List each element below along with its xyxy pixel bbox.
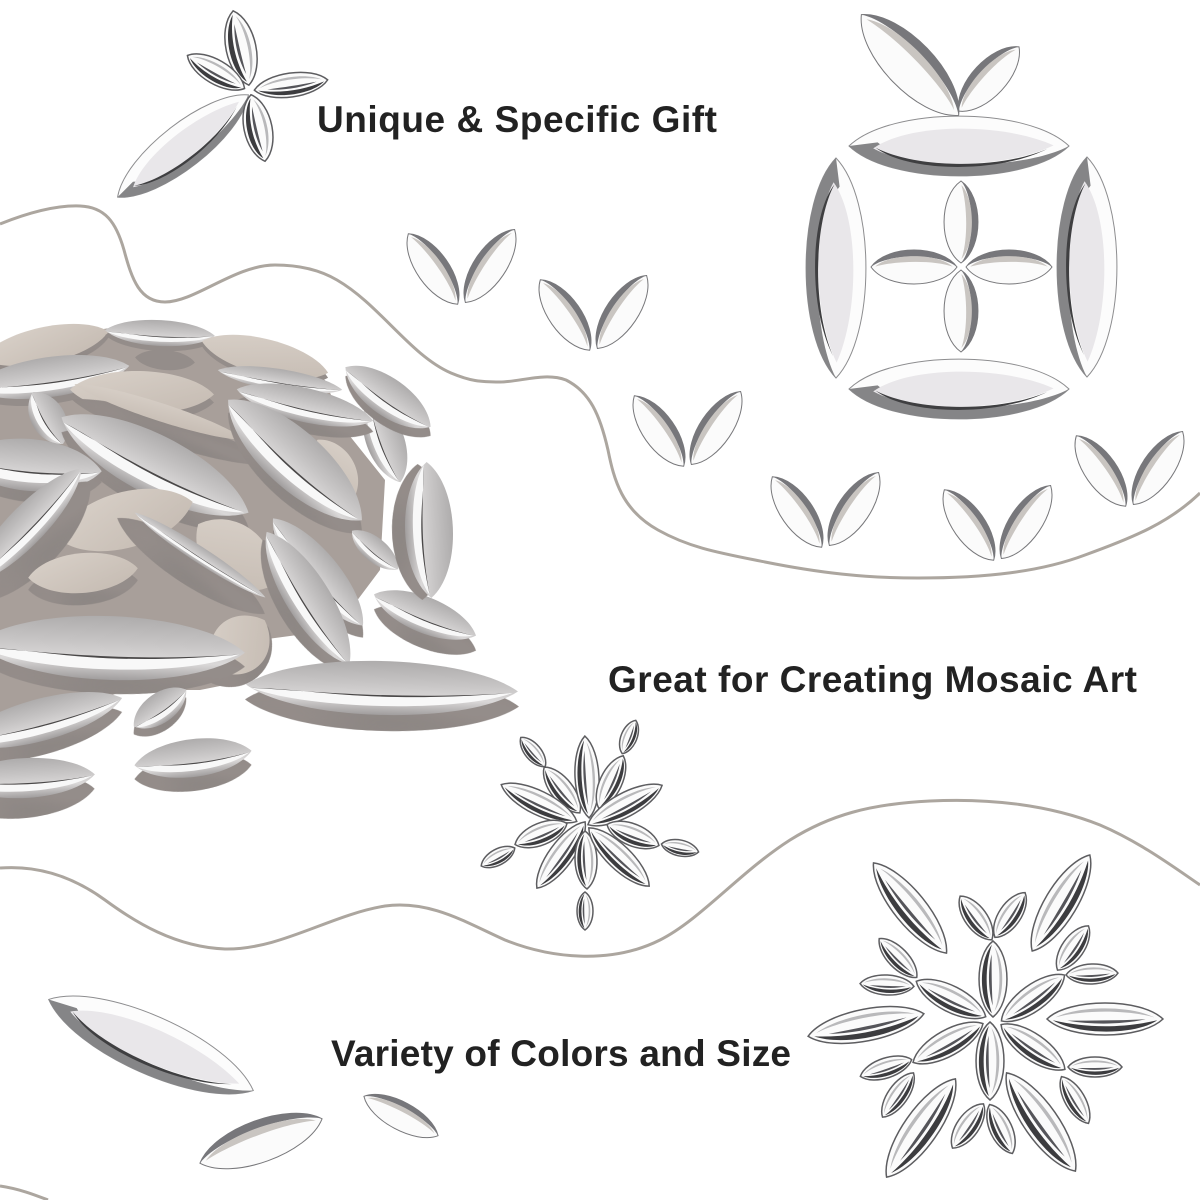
title: Variety of Colors and Size: Variety of Colors and Size bbox=[331, 1033, 791, 1074]
leaf pair 5 bbox=[931, 477, 1064, 569]
leaf pair 4 bbox=[759, 464, 892, 556]
single tiles: bottom left bbox=[37, 973, 445, 1183]
flower: middle bbox=[477, 717, 700, 930]
title: Unique and Specific Gift: Unique & Specific Gift bbox=[317, 99, 717, 140]
leaf pair 1 bbox=[395, 221, 528, 313]
wavy line: upper bbox=[0, 206, 1200, 578]
wavy line: bottom corner bbox=[0, 1186, 48, 1200]
flower: top left bbox=[104, 8, 329, 214]
wavy line: lower bbox=[0, 800, 1200, 956]
title: Great for Creating Mosaic Art: Great for Creating Mosaic Art bbox=[608, 659, 1137, 700]
leaf pair 6 bbox=[1063, 423, 1196, 515]
leaf pair 3 bbox=[621, 383, 754, 475]
flower: bottom right bbox=[805, 847, 1163, 1187]
tile pile bbox=[0, 314, 520, 825]
leaf pair 2 bbox=[527, 267, 660, 359]
mosaic: top right apple bbox=[806, 0, 1117, 419]
